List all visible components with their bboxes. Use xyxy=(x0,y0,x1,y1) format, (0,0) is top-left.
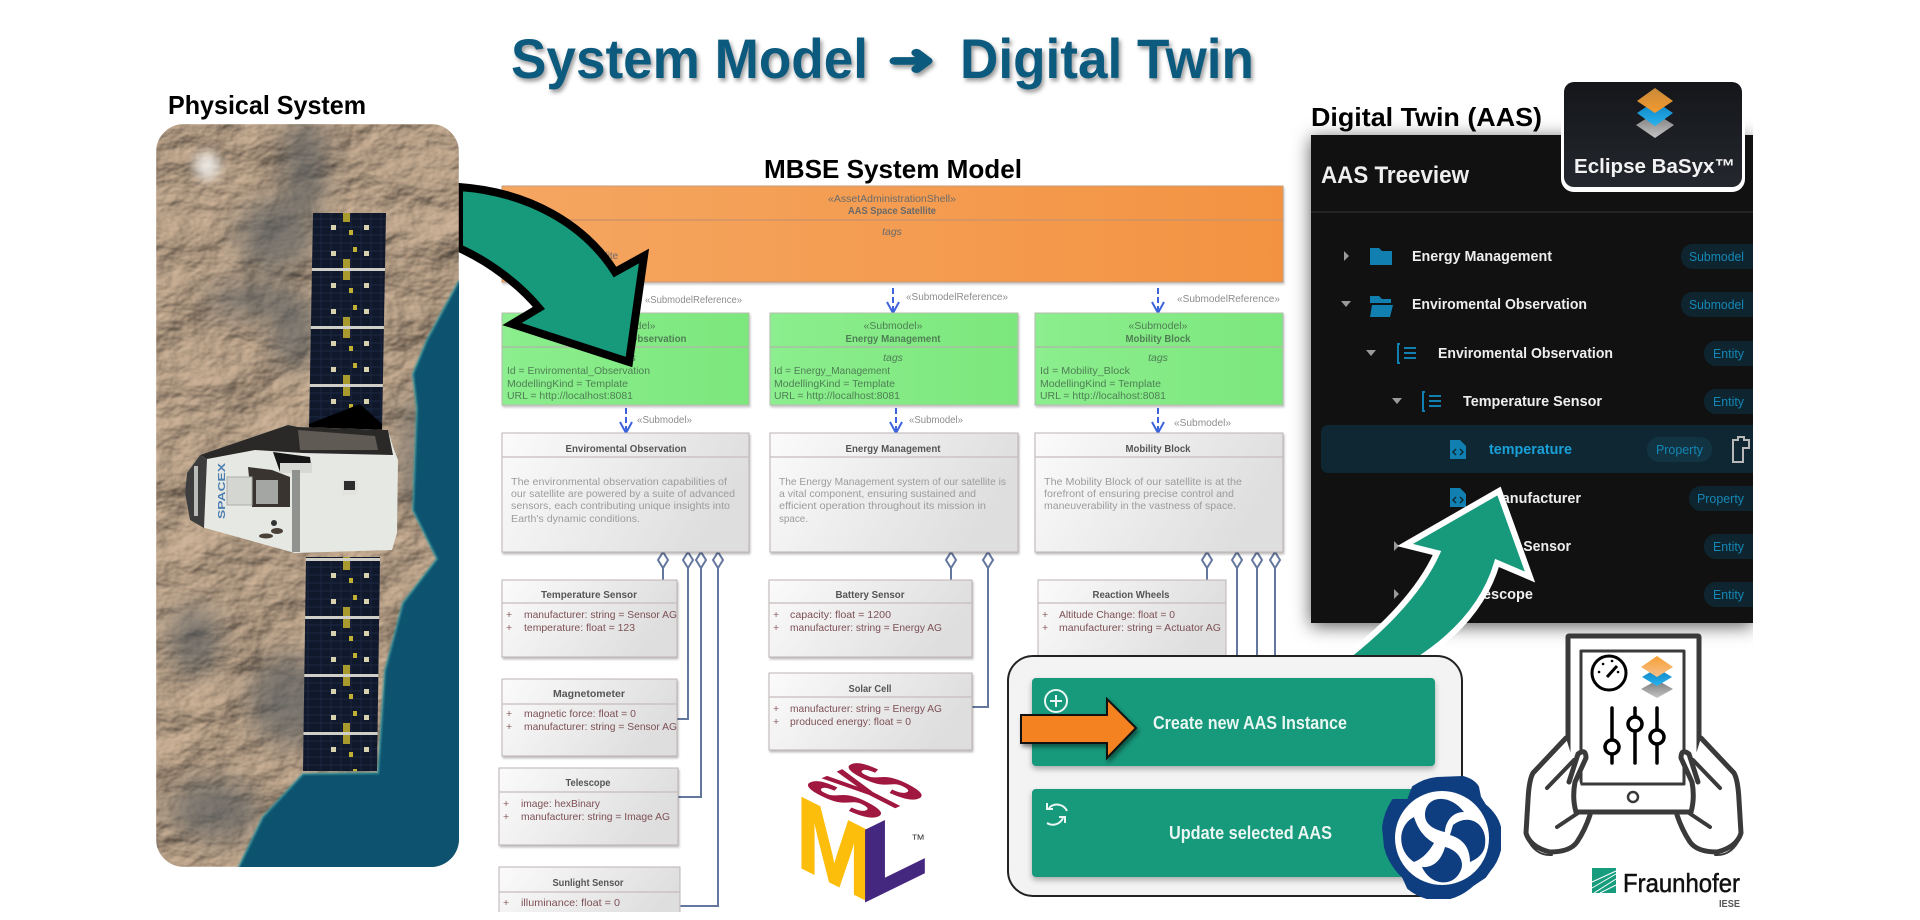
uml block: submodel Mobility Block xyxy=(1035,313,1283,405)
tree rows: Entity xyxy=(1713,588,1745,602)
icon: hands holding tablet xyxy=(1526,636,1741,855)
uml class: Telescope xyxy=(499,768,678,845)
button: create new AAS instance xyxy=(1032,678,1435,766)
uml class: Magnetometer: magnetic force: float = 0 xyxy=(524,708,636,720)
uml block: description Enviromental Observation xyxy=(502,433,749,552)
uml block: submodel Enviromental Observation: «Submodel» xyxy=(597,320,656,332)
uml class: Solar Cell xyxy=(769,673,972,750)
heading: Digital Twin (AAS): Digital Twin (AAS) xyxy=(1311,102,1542,132)
row labels: Energy Management xyxy=(1412,248,1552,265)
document icons xyxy=(1450,440,1466,507)
icon: layers xyxy=(1641,656,1673,698)
uml block: submodel Mobility Block: URL = http://localhost:8081 xyxy=(1040,390,1166,402)
uml class: Battery Sensor: Battery Sensor xyxy=(836,589,904,601)
icon: sliders xyxy=(1605,708,1664,763)
uml block: description Enviromental Observation: sensors, each contributing unique insights into xyxy=(511,500,730,512)
uml block: description Energy Management: The Energy Management system of our satellite is xyxy=(779,476,1006,488)
icon: gauge xyxy=(1592,656,1626,690)
uml class: Temperature Sensor xyxy=(502,580,677,657)
button: create new AAS instance: Create new AAS Instance xyxy=(1153,713,1347,733)
uml block: submodel Energy Management: URL = http://localhost:8081 xyxy=(774,390,900,402)
uml block: submodel Mobility Block: ModellingKind = Template xyxy=(1040,378,1161,390)
uml block: description Enviromental Observation: Enviromental Observation xyxy=(566,443,686,455)
tree rows: Property xyxy=(1697,492,1745,506)
logo: SysML cube: ™ xyxy=(911,831,925,847)
expand carets xyxy=(1341,251,1402,599)
uml block: AAS Space Satellite: «AssetAdministrationShell» xyxy=(828,193,956,205)
uml class: Telescope: + xyxy=(503,798,509,810)
uml class: Reaction Wheels: + xyxy=(1042,609,1048,621)
arrow: physical system to model xyxy=(459,187,644,362)
uml class: Sunlight Sensor: + xyxy=(503,897,509,909)
uml class: Battery Sensor: + xyxy=(773,609,779,621)
uml block: description Energy Management: Energy Management xyxy=(846,443,941,455)
uml class: Solar Cell: manufacturer: string = Energy AG xyxy=(790,703,942,715)
logo: Fraunhofer IESE: Fraunhofer xyxy=(1623,868,1740,898)
uml block: description Enviromental Observation: The environmental observation capabilities of xyxy=(511,476,727,488)
tree rows: Submodel xyxy=(1689,250,1744,264)
uml class: Reaction Wheels: Altitude Change: float = 0 xyxy=(1059,609,1175,621)
uml class: Magnetometer: + xyxy=(506,721,512,733)
references: dashed arrows and labels: «Submodel» xyxy=(637,415,692,426)
uml class: Solar Cell: produced energy: float = 0 xyxy=(790,716,911,728)
uml class: Battery Sensor xyxy=(769,580,972,657)
uml class: Battery Sensor: + xyxy=(773,622,779,634)
tree rows: Entity xyxy=(1713,347,1745,361)
references: dashed arrows and labels: «SubmodelReference» xyxy=(906,292,1008,303)
tree rows: temperature xyxy=(1489,441,1572,458)
uml class: Temperature Sensor: Temperature Sensor xyxy=(541,589,637,601)
panel: MBSE system model diagram xyxy=(499,186,1283,920)
title: System Model xyxy=(511,27,868,90)
uml class: Magnetometer: + xyxy=(506,708,512,720)
photo: satellite over coastline xyxy=(156,115,459,871)
uml block: submodel Energy Management: Energy Management xyxy=(846,333,941,345)
logo: Eclipse BaSyx badge xyxy=(1561,82,1745,192)
uml block: submodel Enviromental Observation: tags xyxy=(616,352,637,364)
panel: AAS treeview xyxy=(1311,135,1774,623)
logo: SysML cube: SYS xyxy=(783,751,947,830)
uml class: Battery Sensor: capacity: float = 1200 xyxy=(790,609,891,621)
tree rows: Entity xyxy=(1713,540,1745,554)
sea xyxy=(237,281,459,871)
uml class: Magnetometer: Magnetometer xyxy=(553,688,625,700)
folder icons xyxy=(1370,248,1392,265)
uml block: description Energy Management xyxy=(770,433,1018,552)
uml class: Temperature Sensor: manufacturer: string = Sensor AG xyxy=(524,609,677,621)
uml class: Telescope: image: hexBinary xyxy=(521,798,601,810)
logo: Fraunhofer IESE: IESE xyxy=(1719,899,1740,910)
panel: AAS instance actions xyxy=(1008,656,1462,896)
connectors: aggregation lines and diamonds xyxy=(658,552,1280,906)
capsule xyxy=(185,425,398,553)
uml block: AAS Space Satellite: tags xyxy=(882,226,903,238)
uml class: Reaction Wheels: manufacturer: string = Actuator AG xyxy=(1059,622,1221,634)
tree rows: Sunlight Sensor xyxy=(1463,538,1571,555)
button: update selected AAS xyxy=(1032,789,1435,877)
uml class: Reaction Wheels xyxy=(1038,580,1226,655)
logo: Eclipse project swirl xyxy=(1383,777,1500,898)
solar panel lower xyxy=(303,557,380,771)
title xyxy=(511,27,1254,90)
uml block: submodel Enviromental Observation: Id = Enviromental_Observation xyxy=(507,365,650,377)
uml class: Reaction Wheels: + xyxy=(1042,622,1048,634)
uml block: description Mobility Block: The Mobility Block of our satellite is at the xyxy=(1044,476,1242,488)
uml class: Telescope: Telescope xyxy=(566,777,611,789)
references: dashed arrows and labels: «Submodel» xyxy=(909,415,963,426)
uml block: description Enviromental Observation: our satellite are powered by a suite of advanced xyxy=(511,488,735,500)
uml block: submodel Enviromental Observation xyxy=(502,313,749,405)
uml class: Magnetometer xyxy=(502,679,677,756)
uml block: AAS Space Satellite: Id = AAS_Space_Satellite xyxy=(507,250,618,262)
heading: MBSE System Model: MBSE System Model xyxy=(764,154,1022,184)
uml block: AAS Space Satellite: AAS Space Satellite xyxy=(848,205,936,217)
heading: Physical System: Physical System xyxy=(168,90,366,120)
uml class: Battery Sensor: manufacturer: string = Energy AG xyxy=(790,622,942,634)
uml class: Temperature Sensor: + xyxy=(506,609,512,621)
uml block: description Enviromental Observation: Earth's dynamic conditions. xyxy=(511,513,640,525)
references: dashed arrows and labels: «Submodel» xyxy=(1174,418,1231,429)
uml block: submodel Mobility Block: «Submodel» xyxy=(1129,320,1188,332)
uml class: Solar Cell: Solar Cell xyxy=(848,683,892,695)
uml block: description Energy Management: efficient operation throughout its mission in xyxy=(779,500,986,512)
uml block: description Mobility Block: Mobility Block xyxy=(1126,443,1191,455)
uml block: submodel Energy Management xyxy=(770,313,1018,405)
logo: SysML cube xyxy=(783,751,947,920)
tree rows: Submodel xyxy=(1689,298,1744,312)
terrain background xyxy=(156,124,459,867)
uml class: Sunlight Sensor: Sunlight Sensor xyxy=(552,877,624,889)
uml block: submodel Mobility Block: Mobility Block xyxy=(1126,333,1191,345)
tree rows: manufacturer xyxy=(1489,490,1581,507)
capsule: SPACEX xyxy=(217,463,228,519)
uml class: Solar Cell: + xyxy=(773,703,779,715)
tree rows: Entity xyxy=(1713,395,1745,409)
uml class: Sunlight Sensor: illuminance: float = 0 xyxy=(521,897,620,909)
uml block: submodel Mobility Block: tags xyxy=(1148,352,1169,364)
uml class: Telescope: manufacturer: string = Image AG xyxy=(521,811,670,823)
uml class: Magnetometer: manufacturer: string = Sensor AG xyxy=(524,721,677,733)
uml block: submodel Energy Management: ModellingKind = Template xyxy=(774,378,895,390)
uml class: Telescope: + xyxy=(503,811,509,823)
uml block: submodel Energy Management: tags xyxy=(883,352,904,364)
uml block: submodel Energy Management: «Submodel» xyxy=(864,320,923,332)
solar panel upper xyxy=(309,213,386,432)
button: update selected AAS: Update selected AAS xyxy=(1169,823,1332,843)
tree rows: Temperature Sensor xyxy=(1463,393,1602,410)
tree rows: Enviromental Observation xyxy=(1412,296,1587,313)
uml class: Temperature Sensor: temperature: float = 123 xyxy=(524,622,635,634)
list icons xyxy=(1398,344,1441,411)
references: dashed arrows and labels: «SubmodelReference» xyxy=(1177,294,1280,305)
uml block: description Mobility Block xyxy=(1035,433,1283,552)
heading: AAS Treeview: AAS Treeview xyxy=(1321,162,1469,189)
logo: Eclipse BaSyx badge: Eclipse BaSyx™ xyxy=(1574,156,1735,178)
logo: Fraunhofer IESE xyxy=(1592,868,1740,910)
uml class: Solar Cell: + xyxy=(773,716,779,728)
references: dashed arrows and labels: «SubmodelReference» xyxy=(645,295,742,306)
uml block: submodel Mobility Block: Id = Mobility_Block xyxy=(1040,365,1131,377)
uml block: AAS Space Satellite xyxy=(502,186,1283,282)
uml block: submodel Enviromental Observation: Enviromental Observation xyxy=(566,333,686,345)
tree rows xyxy=(1321,244,1774,607)
uml class: Temperature Sensor: + xyxy=(506,622,512,634)
treeview background with shadow xyxy=(1311,135,1753,623)
uml block: description Mobility Block: forefront of ensuring precise control and xyxy=(1044,488,1234,500)
chips xyxy=(1647,244,1753,607)
uml block: description Energy Management: a vital component, ensuring sustained and xyxy=(779,488,976,500)
uml block: submodel Enviromental Observation: ModellingKind = Template xyxy=(507,378,628,390)
references: dashed arrows and labels xyxy=(620,288,1280,433)
title: ➜ xyxy=(888,36,935,83)
uml class: Reaction Wheels: Reaction Wheels xyxy=(1092,589,1170,601)
arrow: orange pointer to button xyxy=(1021,699,1136,758)
clipboard icon xyxy=(1733,437,1749,462)
tree rows: Enviromental Observation xyxy=(1438,345,1613,362)
tree rows: Property xyxy=(1656,443,1704,457)
uml block: submodel Enviromental Observation: URL = http://localhost:8081 xyxy=(507,390,633,402)
tree rows: Telescope xyxy=(1463,586,1533,603)
title: Digital Twin xyxy=(960,27,1254,90)
arrow: instance to digital twin xyxy=(1340,491,1530,662)
uml block: description Mobility Block: maneuverability in the vastness of space. xyxy=(1044,500,1236,512)
uml block: submodel Energy Management: Id = Energy_Management xyxy=(774,365,890,377)
uml class: Sunlight Sensor xyxy=(498,866,680,912)
uml block: description Energy Management: space. xyxy=(779,513,808,525)
